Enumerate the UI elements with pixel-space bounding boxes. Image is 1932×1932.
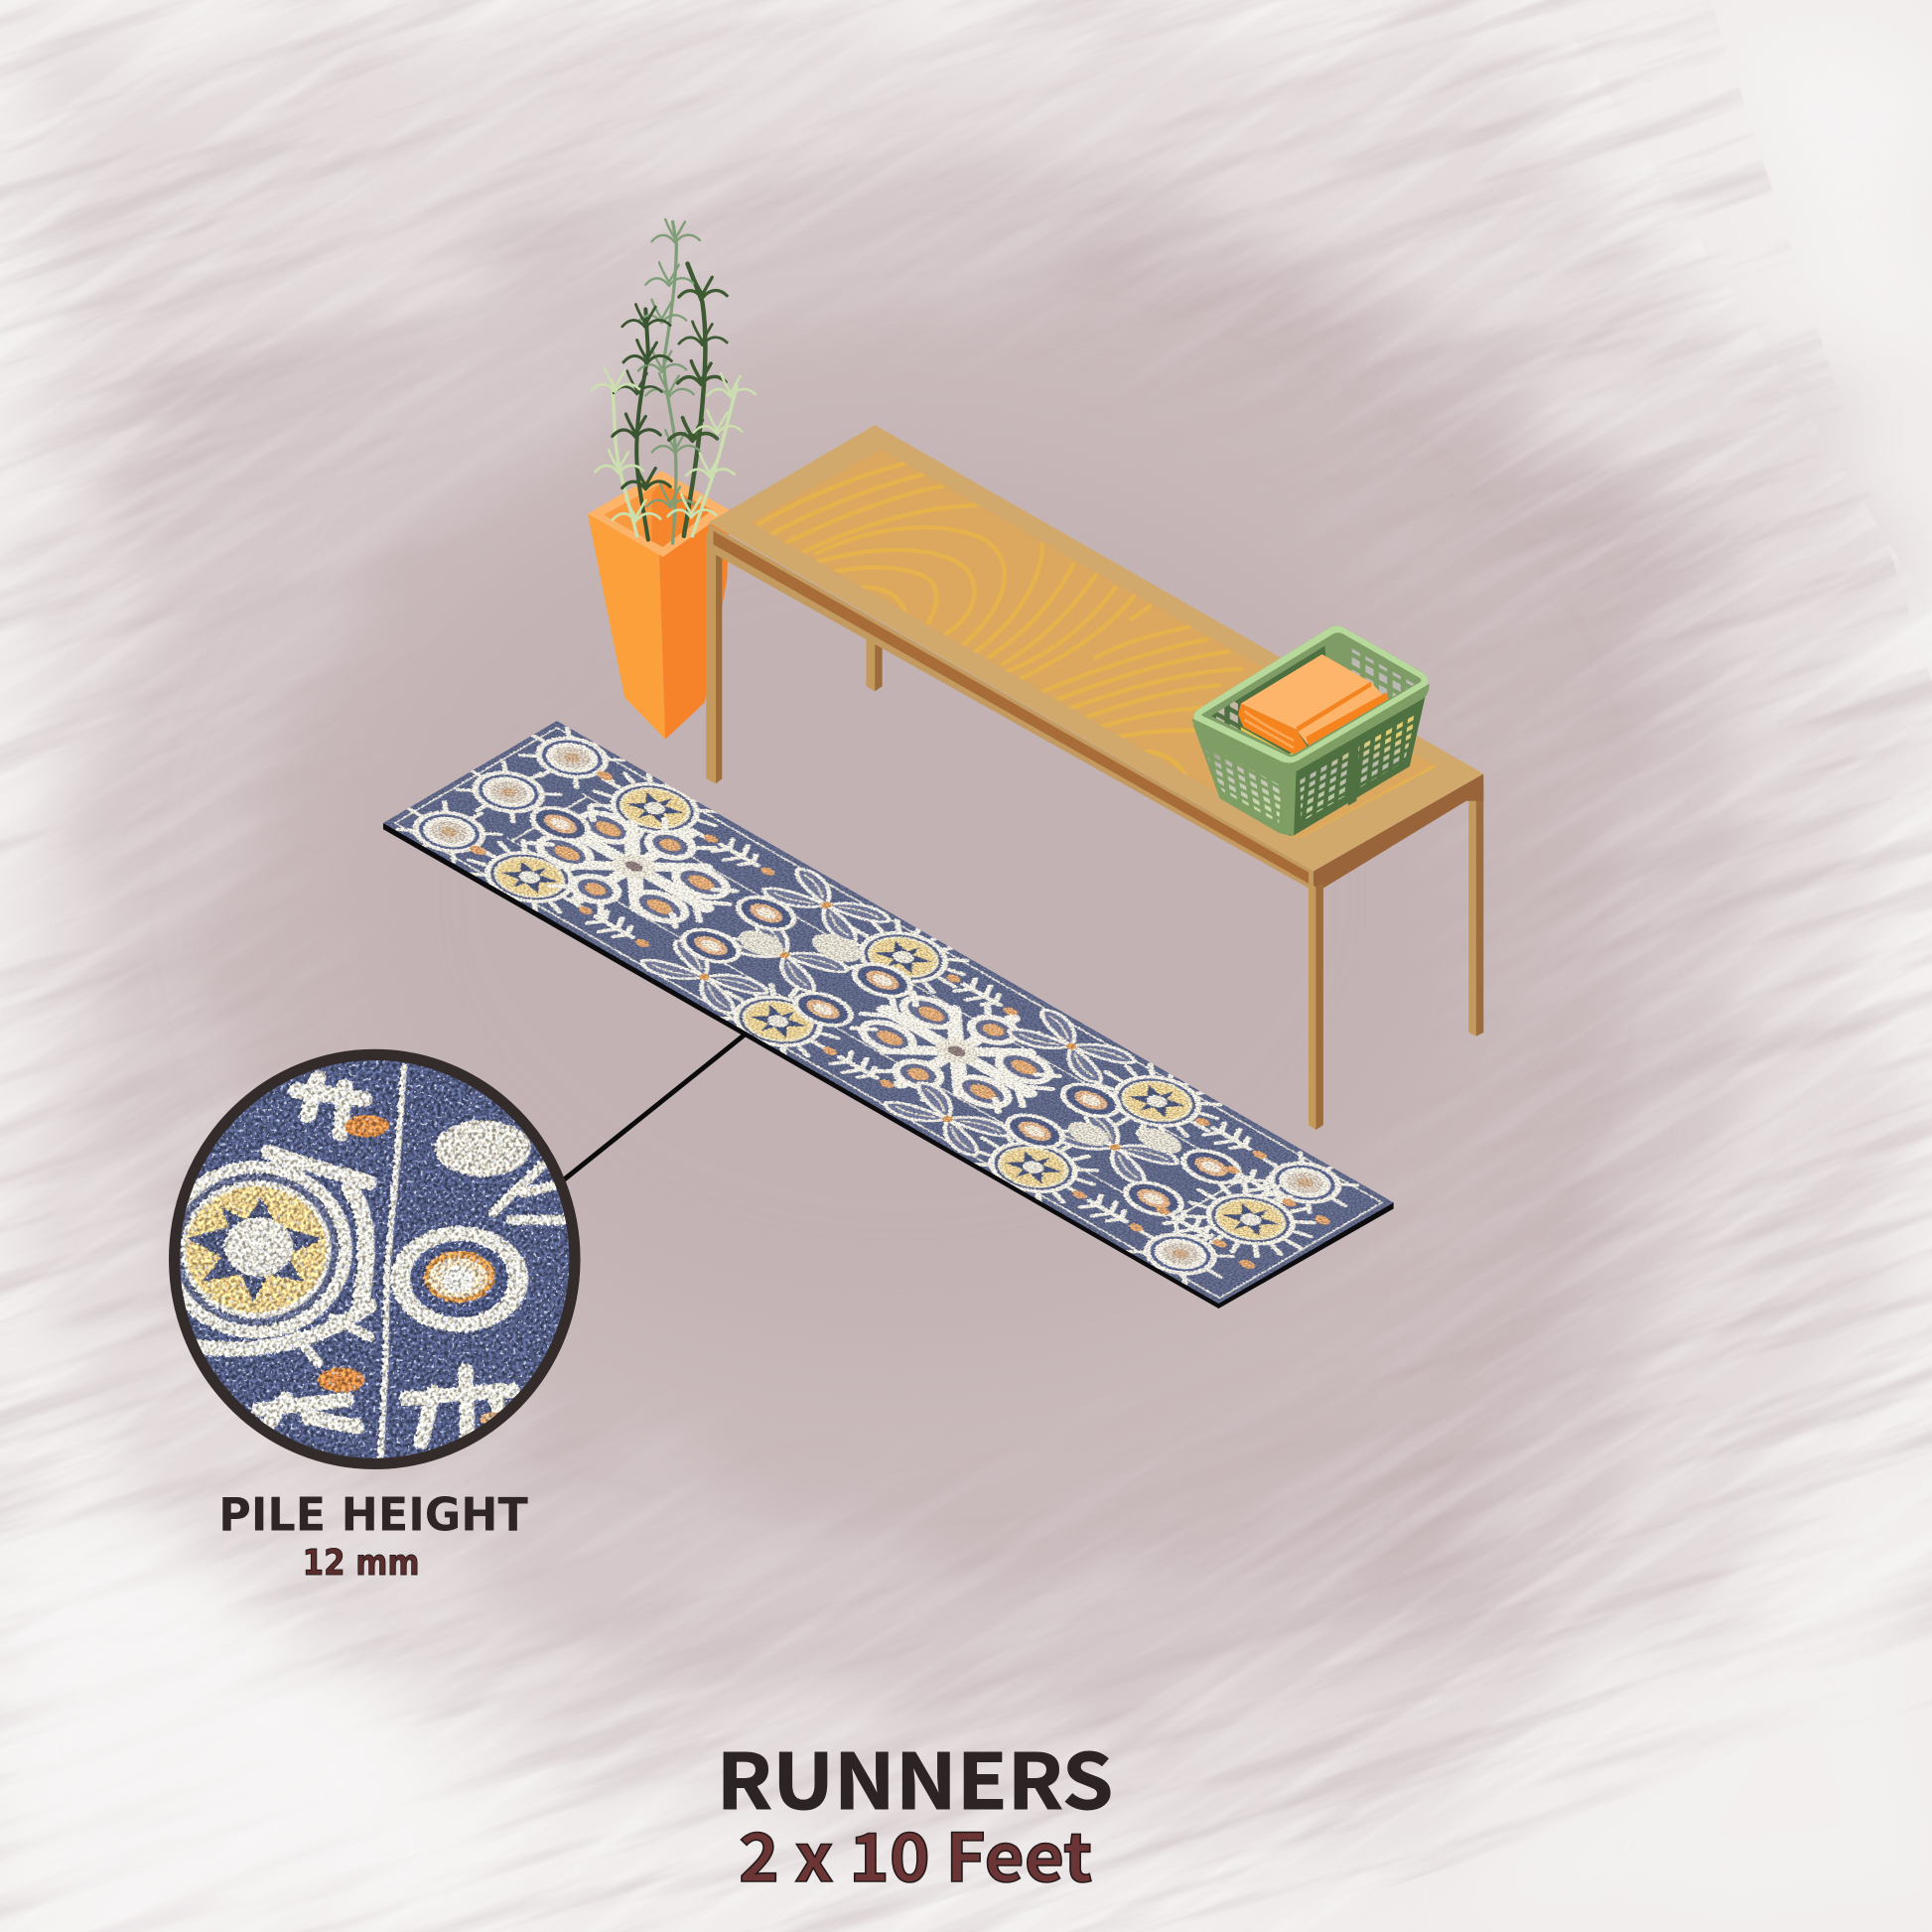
- front left leg: [706, 532, 722, 783]
- title block: [717, 1722, 1113, 1901]
- small round motif: [390, 1226, 528, 1332]
- inset ring: [175, 1054, 575, 1463]
- basket left face: [1192, 724, 1292, 835]
- caption: pile height: [218, 1487, 528, 1584]
- table apron: [709, 523, 1483, 891]
- plant stems and leaves: [592, 219, 756, 543]
- laundry basket with folded towels: [1191, 625, 1430, 835]
- inset knit texture: [160, 1041, 592, 1478]
- basket back walls: [1201, 630, 1423, 763]
- vase: [588, 471, 730, 740]
- table top: [709, 425, 1483, 871]
- rug surface: [360, 709, 1415, 1318]
- orange tufts: [345, 1115, 389, 1138]
- wooden console table: [706, 425, 1483, 1130]
- pile height value: 12 mm: [303, 1543, 420, 1584]
- wood grain: [759, 464, 1433, 839]
- far leg: [866, 637, 883, 691]
- white pile motifs: [173, 1066, 579, 1460]
- pile height label: PILE HEIGHT: [218, 1487, 528, 1541]
- title: runners: RUNNERS: [717, 1722, 1113, 1832]
- inset magnifier: pile close-up: [160, 1041, 592, 1478]
- basket right face: [1282, 695, 1426, 835]
- front right leg: [1309, 883, 1323, 1130]
- plant in orange vase: [588, 219, 756, 740]
- oval pale blob: [435, 1120, 531, 1176]
- rug black edge: [383, 823, 1394, 1309]
- connector line from rug to inset: [563, 1035, 745, 1180]
- size: 2 x 10 feet: 2 x 10 Feet: [739, 1805, 1092, 1901]
- folded towels: [1238, 654, 1389, 761]
- runner rug: [360, 709, 1415, 1318]
- medallion close-up: [160, 1161, 352, 1338]
- right rear leg: [1468, 783, 1483, 1036]
- basket rim: [1191, 625, 1430, 773]
